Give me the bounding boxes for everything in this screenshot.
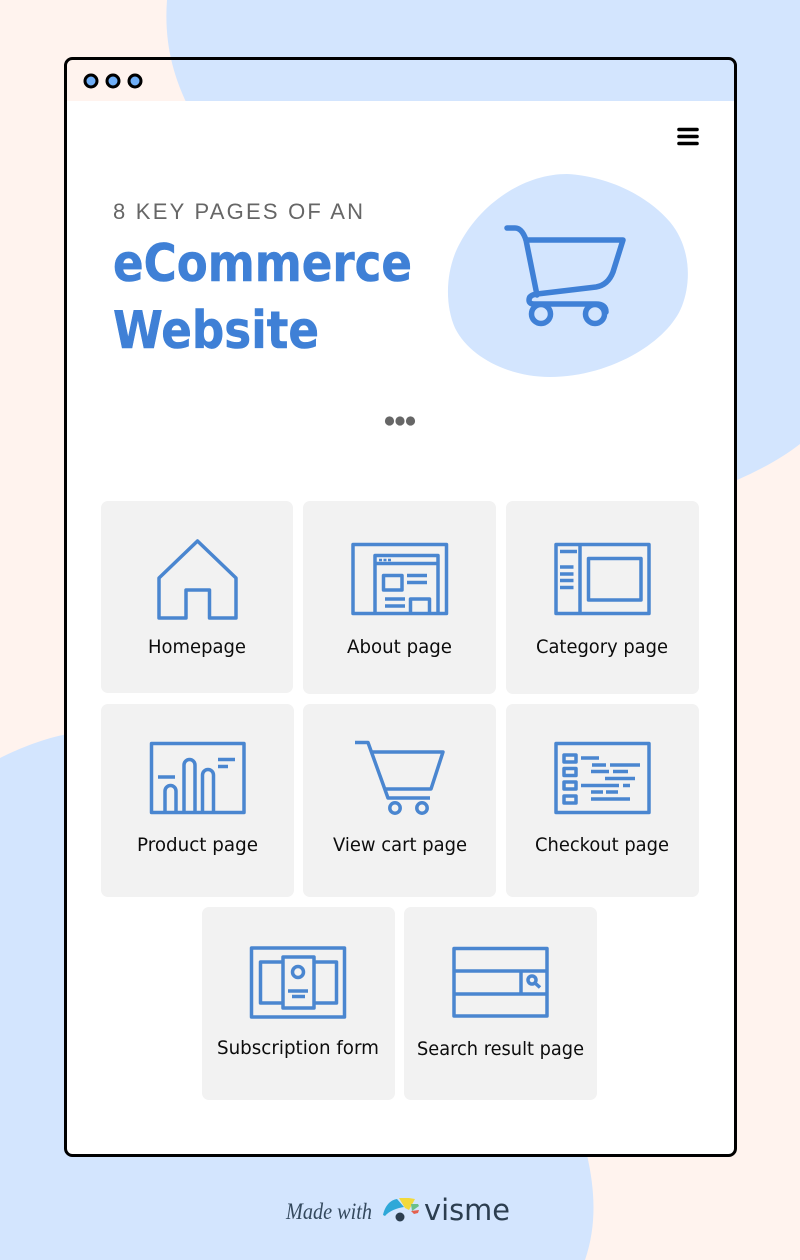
footer: made with visme [285,1193,510,1227]
title line 2: Website [113,301,319,361]
blob behind cart [448,174,688,377]
label: Checkout page [535,834,669,856]
icon: hamburger menu [679,130,697,144]
card: view cart page [303,704,496,897]
card: subscription form [202,907,395,1100]
icon: about layout [353,544,446,614]
card: checkout page [506,704,699,897]
icon: house [159,541,236,618]
subtitle: 8 KEY PAGES OF AN [113,199,363,224]
label: About page [347,636,452,658]
icon: subscription layout [252,948,344,1017]
label: Homepage [148,636,246,658]
window content area [66,101,735,1155]
card: homepage [101,501,293,693]
card: product page [101,704,294,897]
icon: checkout form [556,744,649,812]
window frame [66,58,736,1156]
label: Category page [536,636,668,658]
hero illustration [448,174,688,377]
card: about page [303,501,496,694]
label: Product page [137,834,258,856]
icon: category layout [556,544,649,614]
three dots separator [385,416,415,426]
icon: visme logo [383,1198,419,1222]
visme wordmark: visme [424,1193,510,1227]
icon: shopping cart [507,228,623,324]
icon: cart outline [355,742,443,813]
label: Subscription form [217,1037,379,1059]
made with script text: Made with [285,1199,372,1224]
icon: search layout [454,948,547,1016]
background: bottom left blue blob [0,734,594,1260]
label: Search result page [417,1038,584,1060]
title line 1: eCommerce [113,234,412,294]
card: search result page [404,907,597,1100]
label: View cart page [333,834,467,856]
background: top right blue blob [166,0,800,481]
icon: product layout [152,744,244,812]
heading [113,199,412,361]
card: category page [506,501,699,694]
browser window [66,58,736,1156]
window control dots [85,75,141,87]
